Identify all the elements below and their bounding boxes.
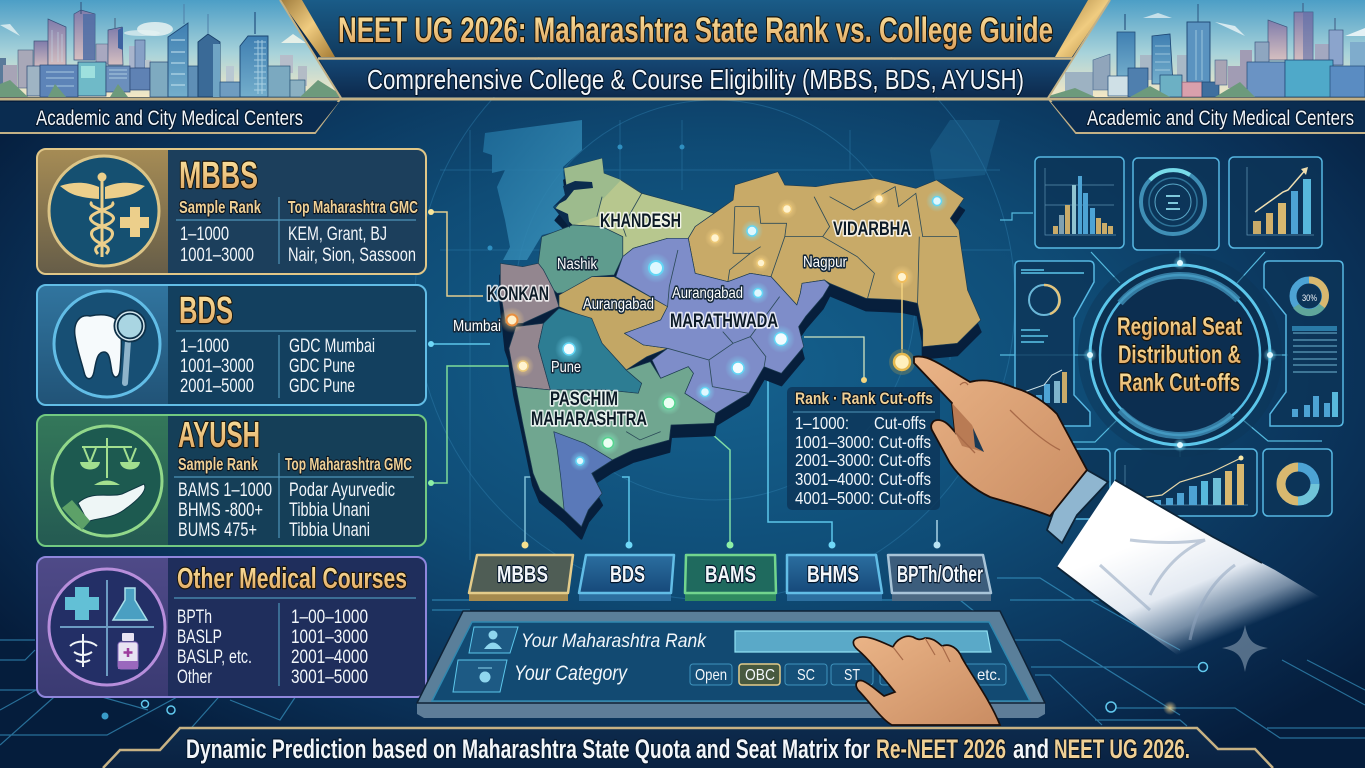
category chips: etc. bbox=[977, 667, 1001, 684]
heading: AYUSH: AYUSH bbox=[178, 414, 260, 455]
category chips: SC bbox=[797, 667, 815, 684]
table: other courses: 1001–3000 bbox=[291, 627, 368, 648]
button: BHMS bbox=[787, 555, 882, 601]
category chips: Open bbox=[695, 667, 727, 684]
panel: AYUSH bbox=[37, 414, 426, 546]
callout: rank cut-offs: 1001–3000: Cut-offs bbox=[795, 432, 931, 452]
table: AYUSH ranks: Tibbia Unani bbox=[289, 520, 370, 541]
heading: MBBS: MBBS bbox=[179, 155, 258, 197]
callout: rank cut-offs: 1–1000: bbox=[795, 413, 849, 433]
table: AYUSH ranks bbox=[174, 453, 414, 541]
table: BDS ranks: GDC Pune bbox=[289, 356, 355, 377]
table: BDS ranks: GDC Pune bbox=[289, 376, 355, 397]
table: other courses: 2001–4000 bbox=[291, 647, 368, 668]
footer text: Re-NEET 2026 bbox=[876, 734, 1006, 764]
heading: Other Medical Courses: Other Medical Courses bbox=[177, 563, 407, 595]
table: AYUSH ranks: BUMS 475+ bbox=[178, 520, 257, 541]
chart: left summary panel bbox=[1015, 261, 1094, 426]
footer text: and bbox=[1013, 734, 1049, 764]
panel: BDS bbox=[37, 285, 426, 405]
table: BDS ranks: 1–1000 bbox=[180, 336, 229, 357]
table: other courses: 3001–5000 bbox=[291, 667, 368, 688]
table: BDS ranks: 2001–5000 bbox=[180, 376, 254, 397]
callout: rank cut-offs: 4001–5000: Cut-offs bbox=[795, 488, 931, 508]
map labels: MAHARASHTRA bbox=[531, 409, 647, 430]
button: BDS bbox=[579, 555, 674, 601]
callout: rank cut-offs: Rank · Rank Cut-offs bbox=[795, 389, 933, 408]
chart: right summary panel: 30% bbox=[1302, 293, 1317, 303]
callout: rank cut-offs: Cut-offs bbox=[874, 413, 926, 433]
icon: user bbox=[469, 627, 518, 653]
circle: regional seat distribution bbox=[1078, 253, 1282, 457]
arm: coat sleeve and pointing hand bbox=[914, 356, 1320, 657]
hand bbox=[914, 356, 1087, 516]
chart: trend bars panel bbox=[1115, 449, 1257, 516]
footer text: Dynamic Prediction based on Maharashtra State Quota and Seat Matrix for bbox=[186, 734, 870, 764]
map labels bbox=[453, 211, 911, 430]
icon: category bbox=[453, 660, 507, 692]
table: other courses: Other bbox=[177, 667, 212, 688]
chart: radial gauge panel bbox=[1133, 158, 1219, 250]
map labels: Mumbai bbox=[453, 318, 501, 335]
circle heading: Regional Seat bbox=[1117, 313, 1243, 341]
icon: tooth and mirror bbox=[54, 291, 160, 397]
callout: rank cut-offs: 2001–3000: Cut-offs bbox=[795, 450, 931, 470]
table: AYUSH ranks: Podar Ayurvedic bbox=[289, 480, 395, 501]
callout: rank cut-offs bbox=[787, 337, 940, 510]
partial panel behind hand bbox=[1067, 449, 1110, 519]
caption left bbox=[0, 102, 339, 132]
title band bbox=[302, 0, 1088, 57]
map labels: Aurangabad bbox=[672, 285, 743, 302]
city skyline right bbox=[1045, 0, 1365, 98]
table: other courses: BASLP, etc. bbox=[177, 647, 252, 668]
category chips bbox=[690, 664, 1006, 685]
category chips: ST bbox=[844, 667, 860, 684]
callout: rank cut-offs: 3001–4000: Cut-offs bbox=[795, 469, 931, 489]
table: MBBS ranks: Sample Rank bbox=[179, 197, 261, 217]
map labels: Nashik bbox=[557, 256, 598, 273]
sparkle bbox=[1222, 625, 1268, 672]
table: AYUSH ranks: Sample Rank bbox=[178, 454, 258, 474]
circle heading bbox=[1117, 313, 1243, 397]
map labels: KHANDESH bbox=[600, 211, 681, 232]
table: BDS ranks: GDC Mumbai bbox=[289, 336, 375, 357]
region: Paschim Maharashtra bbox=[516, 362, 716, 527]
label: your rank: Your Maharashtra Rank bbox=[521, 631, 707, 652]
region: southern Paschim bbox=[554, 432, 612, 527]
icon: course symbols bbox=[49, 569, 165, 685]
panel: MBBS bbox=[37, 149, 426, 274]
circle heading: Rank Cut-offs bbox=[1119, 369, 1240, 397]
subtitle: Comprehensive College & Course Eligibility (MBBS, BDS, AYUSH) bbox=[367, 64, 1024, 95]
region: Konkan bbox=[500, 263, 559, 323]
cuff bbox=[1047, 470, 1108, 543]
title: NEET UG 2026: Maharashtra State Rank vs. College Guide bbox=[338, 11, 1053, 50]
chart: histogram panel bbox=[1035, 157, 1124, 248]
button: BAMS bbox=[685, 555, 776, 601]
table: AYUSH ranks: Top Maharashtra GMC bbox=[285, 454, 412, 474]
header banner bbox=[0, 0, 1365, 133]
table: BDS ranks bbox=[176, 331, 416, 398]
map inlet notches bbox=[553, 181, 593, 228]
table: MBBS ranks: Top Maharashtra GMC bbox=[288, 197, 418, 217]
map labels: MARATHWADA bbox=[670, 311, 778, 332]
hand: typing bbox=[853, 636, 1000, 725]
button: BHMS: BHMS bbox=[807, 561, 859, 587]
table: AYUSH ranks: Tibbia Unani bbox=[289, 500, 370, 521]
table: MBBS ranks: Nair, Sion, Sassoon bbox=[288, 245, 416, 266]
table: AYUSH ranks: BAMS 1–1000 bbox=[178, 480, 272, 501]
region: Khandesh bbox=[556, 158, 714, 257]
chart: donut panel bbox=[1263, 449, 1332, 516]
table: MBBS ranks bbox=[176, 197, 418, 266]
map labels: VIDARBHA bbox=[833, 219, 911, 240]
input field bbox=[735, 631, 991, 652]
table: other courses: 1–00–1000 bbox=[291, 607, 368, 628]
sleeve bbox=[1057, 480, 1320, 657]
table: AYUSH ranks: BHMS -800+ bbox=[178, 500, 263, 521]
button: BAMS: BAMS bbox=[705, 561, 756, 587]
city skyline left bbox=[0, 0, 345, 98]
caption right bbox=[1051, 102, 1365, 132]
panel: Other Medical Courses bbox=[37, 557, 426, 697]
table: BDS ranks: 1001–3000 bbox=[180, 356, 254, 377]
dashboard: connector lines bbox=[1000, 213, 1322, 457]
category chips: OBC bbox=[745, 667, 775, 684]
map labels: Nagpur bbox=[803, 254, 848, 271]
button: MBBS bbox=[469, 555, 573, 601]
region: Vidarbha bbox=[688, 172, 981, 347]
map labels: Aurangabad bbox=[583, 296, 654, 313]
region: Marathwada bbox=[616, 238, 830, 413]
icon: scales and hand bbox=[52, 426, 162, 536]
console: rank input bbox=[417, 611, 1045, 718]
connectors: panels to map bbox=[428, 209, 940, 548]
map markers bbox=[499, 189, 948, 471]
subtitle band bbox=[320, 60, 1072, 97]
region: Nashik bbox=[538, 225, 623, 293]
icon: caduceus bbox=[49, 156, 159, 266]
map labels: KONKAN bbox=[487, 284, 549, 305]
table: other courses: BASLP bbox=[177, 627, 222, 648]
table: MBBS ranks: KEM, Grant, BJ bbox=[288, 224, 387, 245]
table: MBBS ranks: 1–1000 bbox=[180, 224, 229, 245]
table: other courses bbox=[174, 598, 416, 688]
footer text: NEET UG 2026. bbox=[1054, 734, 1190, 764]
button: BPTh/Other: BPTh/Other bbox=[897, 561, 983, 587]
button: BPTh/Other bbox=[888, 555, 991, 601]
map: Maharashtra regions bbox=[453, 120, 1000, 539]
neighbouring land bbox=[483, 120, 582, 260]
map labels: PASCHIM bbox=[550, 389, 618, 410]
footer banner bbox=[103, 728, 1273, 768]
button: BDS: BDS bbox=[610, 561, 645, 587]
table: MBBS ranks: 1001–3000 bbox=[180, 245, 254, 266]
region: Aurangabad west bbox=[559, 277, 668, 370]
chart: growth bars panel bbox=[1229, 157, 1322, 248]
button: MBBS: MBBS bbox=[497, 561, 548, 587]
buttons: course selector bbox=[469, 555, 991, 601]
map labels: Pune bbox=[551, 359, 581, 376]
heading: BDS: BDS bbox=[179, 290, 233, 332]
chart: right summary panel bbox=[1264, 261, 1343, 426]
circle heading: Distribution & bbox=[1118, 341, 1241, 369]
region: Pune bbox=[538, 308, 642, 393]
gold slants bbox=[280, 0, 335, 57]
caption left: Academic and City Medical Centers bbox=[36, 107, 303, 130]
table: other courses: BPTh bbox=[177, 607, 212, 628]
label: your category: Your Category bbox=[514, 662, 628, 685]
map depth bbox=[500, 170, 981, 539]
